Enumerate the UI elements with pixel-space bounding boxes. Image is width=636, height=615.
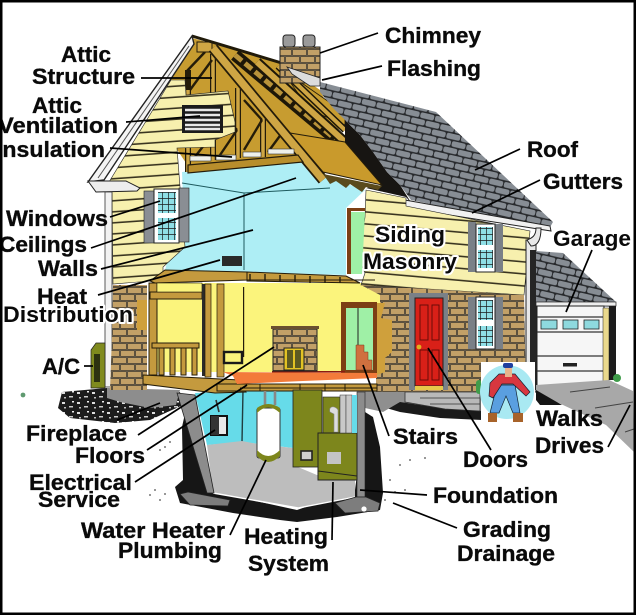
attic floor beam: [188, 155, 303, 173]
label: Grading Drainage: Drainage: [457, 541, 555, 566]
gold trim beside opening: [377, 303, 392, 375]
gable and left siding: [109, 80, 235, 284]
green opening: [351, 212, 365, 274]
label: Water Heater Plumbing: [81, 518, 225, 563]
worker icon: [476, 362, 535, 422]
heat register: [222, 256, 242, 266]
leader lines: [84, 33, 630, 540]
garage roof: [536, 251, 616, 307]
right siding: [359, 190, 530, 295]
A/C unit: [91, 343, 105, 388]
label: Grading Drainage: Grading: [463, 517, 551, 542]
label: Attic Structure: Attic: [61, 42, 111, 67]
collar block: [197, 42, 212, 52]
label: Stairs: Stairs: [393, 424, 458, 449]
label: Garage: Garage: [553, 226, 631, 251]
label: Gutters: Gutters: [543, 169, 623, 194]
water heater: [257, 391, 280, 462]
gable vent: [182, 105, 223, 133]
first floor room: [155, 283, 383, 372]
label: Ceilings: Ceilings: [0, 232, 87, 257]
top ridge line: [192, 36, 285, 64]
gold triangle below flashing: [280, 68, 345, 125]
orange floor: [223, 372, 377, 384]
upper right window: [468, 222, 503, 272]
basement walls: [195, 390, 293, 448]
gable rake trim: [88, 36, 194, 182]
label: Walks Drives: [535, 406, 604, 458]
label: Flashing: Flashing: [387, 56, 481, 81]
left brick column: [110, 285, 147, 390]
garage post: [603, 308, 609, 381]
main roof shingles: [320, 82, 553, 229]
shrub: [613, 374, 621, 382]
rafter tails: [323, 174, 382, 192]
upper room walls: [165, 158, 365, 275]
downspout, right: [526, 228, 541, 392]
label: Siding Masonry: [363, 222, 458, 274]
stair wall opening trim: [347, 208, 365, 274]
diagonal braces: [186, 52, 282, 158]
roof underlay: [320, 90, 412, 204]
front foundation and soil edge: [376, 392, 482, 420]
insulation: [190, 149, 294, 161]
label: Attic Ventilation: Ventilation: [0, 113, 118, 138]
label: Floors: Floors: [75, 443, 145, 468]
railing: [152, 343, 199, 348]
foundation pit soil: [175, 400, 383, 522]
front steps: [405, 392, 480, 411]
basement wall corner: [242, 390, 243, 442]
label: Windows: Windows: [6, 206, 108, 231]
label: Heat Distribution: [3, 284, 133, 327]
left window with shutters: [144, 188, 189, 243]
label: Heating System: System: [248, 551, 329, 576]
label: Electrical Service: Service: [38, 487, 120, 512]
first floor deck beams: [143, 375, 377, 393]
attic framing: [171, 36, 345, 180]
ground rubble, left: [58, 388, 183, 423]
garage door: [537, 306, 604, 386]
roof decking: [290, 133, 382, 185]
left downspout: [105, 192, 112, 387]
gutter: [405, 200, 551, 231]
left foundation wall: [177, 393, 214, 493]
left interior framing: [149, 283, 244, 377]
label: Attic Structure: Structure: [32, 64, 135, 89]
label: Siding Masonry: Masonry: [363, 249, 458, 274]
rafters: [213, 48, 345, 180]
door frame: [409, 293, 448, 390]
label: Fireplace: Fireplace: [26, 421, 127, 446]
electrical box: [211, 400, 227, 435]
label: Doors: Doors: [463, 447, 528, 472]
label: Attic Ventilation: [0, 93, 118, 138]
ceiling lines: [182, 183, 330, 270]
right foundation wall: [357, 392, 365, 497]
label: Water Heater Plumbing: Water Heater: [81, 518, 225, 543]
label: Walks Drives: Drives: [535, 433, 604, 458]
gold strip on column: [137, 300, 147, 330]
left foundation block: [107, 388, 180, 408]
basement floor: [207, 441, 355, 508]
garage: [536, 251, 616, 386]
label: A/C: A/C: [42, 354, 80, 379]
label: Heat Distribution: Distribution: [3, 302, 133, 327]
label: Grading Drainage: [457, 517, 555, 566]
vertical studs: [188, 54, 263, 172]
label: Attic Ventilation: Attic: [32, 93, 82, 118]
label: Foundation: Foundation: [433, 483, 558, 508]
label: Walks Drives: Walks: [536, 406, 603, 431]
soffit: [88, 181, 140, 192]
floor band: [150, 270, 375, 283]
house cutaway illustration: [21, 35, 634, 522]
label: Electrical Service: [29, 470, 132, 512]
label: Heating System: [244, 524, 329, 576]
footings: [180, 492, 380, 513]
fireplace: [271, 326, 319, 371]
stair window opening: [341, 302, 377, 373]
label: Roof: Roof: [527, 137, 579, 162]
chimney: [280, 35, 320, 86]
label: Heat Distribution: Heat: [37, 284, 88, 309]
label: Attic Structure: [32, 42, 135, 89]
label: Chimney: Chimney: [385, 23, 482, 48]
label: Siding Masonry: Siding: [375, 222, 445, 247]
furnace: [293, 390, 357, 480]
front brick wall: [361, 285, 526, 392]
red door: [415, 298, 443, 390]
label: Water Heater Plumbing: Plumbing: [118, 538, 222, 563]
specks around pit: [21, 393, 426, 501]
label: Walls: Walls: [38, 256, 98, 281]
lower right window: [468, 297, 503, 349]
green bush behind worker: [476, 380, 482, 394]
label: Electrical Service: Electrical: [29, 470, 132, 495]
driveway: [536, 380, 634, 452]
label: Heating System: Heating: [244, 524, 328, 549]
